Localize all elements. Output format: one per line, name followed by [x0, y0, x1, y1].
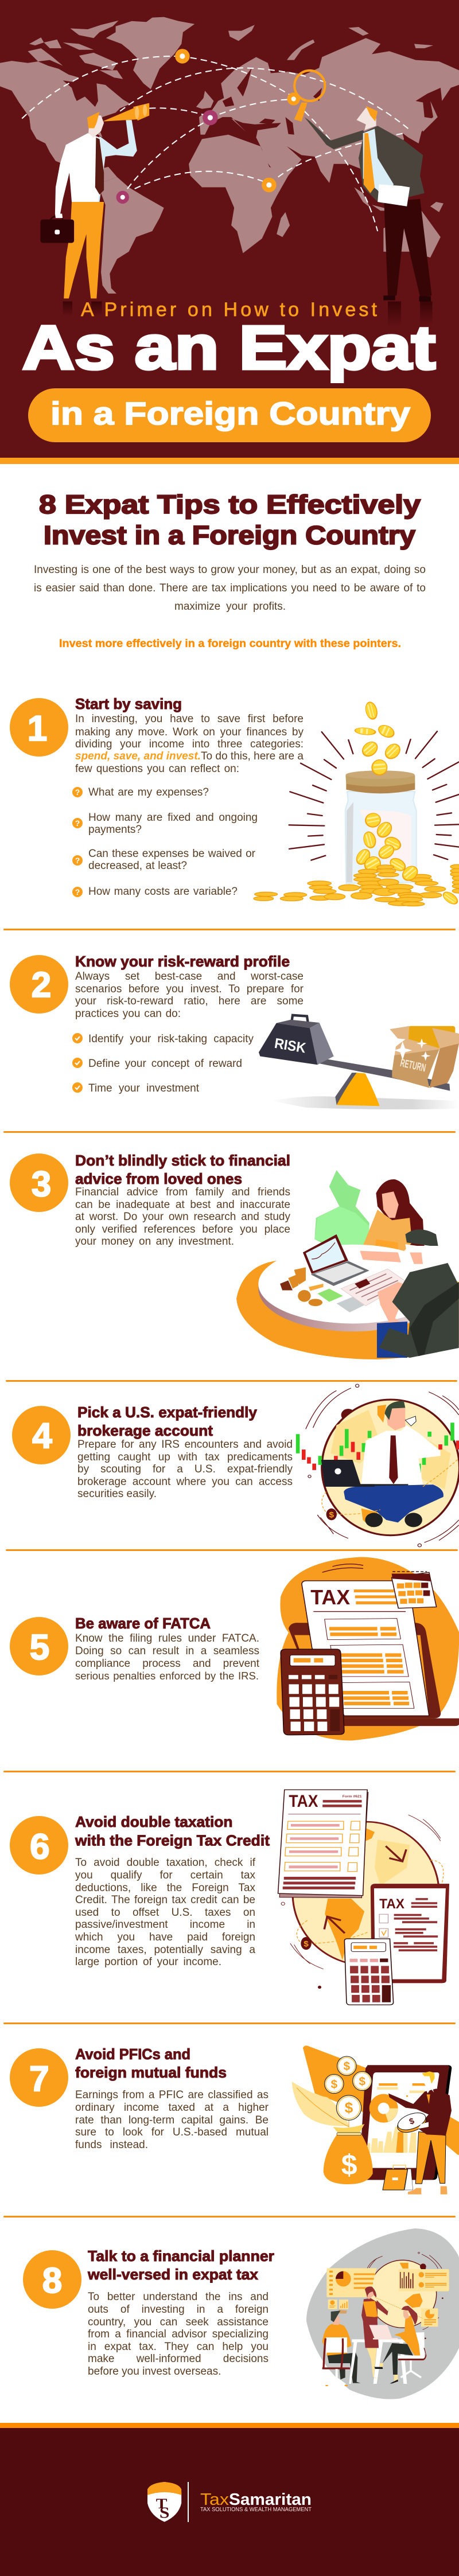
number badge 5 — [10, 1617, 68, 1675]
logo shield: S — [160, 2504, 170, 2522]
body 8: country, you can seek assistance — [88, 2316, 269, 2328]
heading 8 — [88, 2247, 274, 2284]
logo wordmark — [200, 2489, 312, 2513]
intro text: maximize your profits. — [174, 601, 286, 613]
question list: ? — [75, 887, 80, 896]
body 7: funds instead. — [75, 2139, 148, 2151]
heading 6: Avoid double taxation — [75, 1813, 233, 1830]
body 4: by scouting for a U.S. expat-friendly — [77, 1463, 293, 1475]
body 7: rate than long-term capital gains. Be — [75, 2114, 269, 2126]
number badge 1: 1 — [28, 709, 47, 749]
illustration: investor with money bag: $ — [359, 2075, 365, 2088]
body 1 — [75, 713, 304, 775]
number badge 6 — [10, 1816, 68, 1874]
illustration: advisor meeting — [304, 2226, 459, 2403]
number badge 7: 7 — [29, 2059, 49, 2099]
main heading — [39, 490, 422, 551]
heading 8: Talk to a financial planner — [88, 2247, 274, 2265]
orange callout: Invest more effectively in a foreign country with these pointers. — [59, 638, 401, 650]
checklist: Define your concept of reward — [88, 1058, 242, 1070]
heading 4 — [77, 1403, 258, 1439]
panel: tip 8 — [0, 2216, 459, 2423]
number badge 8 — [23, 2250, 81, 2309]
heading 6 — [75, 1813, 270, 1849]
intro text: is easier said than done. There are tax implications you need to be aware of to — [34, 582, 426, 594]
body 8: outs of investing in a foreign — [88, 2304, 269, 2315]
body 6: deductions, like the Foreign Tax — [75, 1881, 255, 1894]
body 1: In investing, you have to save first before — [75, 713, 304, 725]
route lines — [22, 56, 409, 231]
body 3: your money on any investment. — [75, 1236, 234, 1248]
illustration: investor with money bag: $ — [343, 2060, 350, 2073]
heading 4: Pick a U.S. expat-friendly — [77, 1403, 258, 1420]
heading 3: advice from loved ones — [75, 1170, 242, 1187]
body 6 — [75, 1856, 256, 1967]
body 4: getting caught up with tax predicaments — [77, 1451, 293, 1463]
body 4 — [77, 1439, 293, 1500]
body 6: used to offset U.S. taxes on — [75, 1907, 255, 1918]
number badge 2 — [10, 955, 68, 1014]
heading 7 — [75, 2045, 227, 2082]
question list: Can these expenses be waived or — [88, 848, 255, 860]
question list — [72, 786, 258, 898]
body 6: Credit. The foreign tax credit can be — [75, 1894, 255, 1905]
illustration: investor with money bag: $ — [408, 2117, 415, 2127]
number badge 4 — [12, 1406, 71, 1464]
body 5: Doing so can result in a seamless — [75, 1645, 259, 1657]
body 3: only verified references before you place — [75, 1223, 290, 1236]
heading 3 — [75, 1152, 290, 1187]
man with binoculars — [40, 103, 149, 298]
illustration: foreign tax forms and globe: $ — [304, 1940, 309, 1948]
logo wordmark: Tax — [200, 2491, 230, 2509]
body 2 — [75, 971, 304, 1020]
panel: tip 5 — [3, 1557, 459, 1772]
panel: tip 2 — [3, 953, 459, 1133]
number badge 2: 2 — [32, 965, 51, 1005]
man with magnifying glass — [294, 71, 432, 302]
panel: tip 3 — [6, 1152, 459, 1382]
body 5: compliance process and prevent — [75, 1658, 259, 1670]
checklist: Identify your risk-taking capacity — [88, 1033, 254, 1045]
panel: introduction — [34, 490, 426, 650]
body 3: Financial advice from family and friends — [75, 1186, 290, 1198]
body 6: which you have paid foreign — [75, 1931, 255, 1943]
question list: decreased, at least? — [88, 860, 187, 872]
question list: ? — [75, 819, 80, 828]
body 8: before you invest overseas. — [88, 2365, 221, 2377]
body 1: dividing your income into three categories: — [75, 738, 304, 750]
heading 6: with the Foreign Tax Credit — [75, 1831, 270, 1849]
illustration: risk and return seesaw — [258, 1014, 459, 1109]
main heading: Invest in a Foreign Country — [44, 521, 415, 550]
body 5 — [75, 1632, 259, 1682]
illustration: couple reviewing finances — [236, 1170, 459, 1359]
body 4: Prepare for any IRS encounters and avoid — [77, 1439, 293, 1451]
illustration: foreign tax forms and globe: TAX — [289, 1791, 318, 1811]
title pill — [28, 388, 431, 442]
world map — [0, 17, 459, 294]
heading 3: Don’t blindly stick to financial — [75, 1152, 290, 1169]
illustration: investor with laptop and candlesticks: $ — [329, 1511, 334, 1519]
logo shield: T — [156, 2495, 168, 2511]
question list: How many costs are variable? — [88, 886, 238, 898]
main heading: 8 Expat Tips to Effectively — [39, 490, 421, 519]
intro text: Investing is one of the best ways to grow your money, but as an expat, doing so — [34, 564, 426, 576]
illustration: coin jar — [253, 702, 459, 906]
illustration: investor with money bag — [291, 2044, 459, 2197]
illustration: investor with money bag: $ — [341, 2149, 357, 2181]
body 2: practices you can do: — [75, 1007, 181, 1020]
number badge 5: 5 — [30, 1628, 49, 1667]
body 6: passive/investment income in — [75, 1919, 255, 1931]
logo wordmark: Samaritan — [229, 2491, 312, 2509]
checklist — [72, 1033, 254, 1094]
number badge 4: 4 — [32, 1416, 52, 1456]
body 7 — [75, 2089, 269, 2152]
number badge 1 — [10, 698, 68, 757]
body 2: your risk-to-reward ratio, here are some — [75, 995, 304, 1007]
body 3: at worst. Do your own research and study — [75, 1211, 290, 1223]
number badge 3: 3 — [32, 1164, 51, 1205]
illustration: risk and return seesaw: RETURN — [399, 1057, 427, 1074]
heading 5: Be aware of FATCA — [75, 1615, 211, 1632]
body 8: To better understand the ins and — [88, 2291, 269, 2302]
subtitle: A Primer on How to Invest — [81, 299, 378, 321]
body 6: To avoid double taxation, check if — [75, 1856, 255, 1869]
question list: ? — [75, 788, 80, 797]
logo shield — [147, 2482, 181, 2522]
illustration: investor with money bag: $ — [344, 2099, 353, 2117]
body 8: in expat tax. They can help you — [88, 2340, 269, 2353]
body 6: you qualify for certain tax — [75, 1869, 255, 1881]
illustration: tax form and calculator — [277, 1557, 459, 1740]
heading 4: brokerage account — [77, 1422, 213, 1439]
panel: tip 6 — [3, 1790, 456, 2024]
body 1: making any move. Work on your finances by — [75, 726, 304, 738]
header illustration and title — [0, 0, 459, 464]
illustration: tax form and calculator: TAX — [310, 1587, 350, 1609]
body 6: large portion of your income. — [75, 1956, 221, 1967]
heading 7: Avoid PFICs and — [75, 2045, 190, 2063]
body 5: Know the filing rules under FATCA. — [75, 1632, 259, 1644]
panel: header — [0, 0, 459, 464]
heading 1: Start by saving — [75, 695, 182, 712]
body 1: spend, save, and invest.To do this, here are a — [75, 750, 304, 762]
number badge 3 — [10, 1153, 68, 1212]
body 7: ordinary income taxed at a higher — [75, 2102, 269, 2114]
body 1: few questions you can reflect on: — [75, 763, 239, 775]
body 2: scenarios before you invest. To prepare for — [75, 983, 304, 995]
body 7: Earnings from a PFIC are classified as — [75, 2089, 269, 2101]
illustration: foreign tax forms and globe: Form #621 — [343, 1795, 362, 1798]
question list: payments? — [88, 824, 142, 836]
body 5: serious penalties enforced by the IRS. — [75, 1670, 259, 1682]
body 8: from a financial advisor specializing — [88, 2328, 269, 2340]
body 4: securities easily. — [77, 1488, 157, 1500]
logo wordmark: TAX SOLUTIONS & WEALTH MANAGEMENT — [200, 2506, 312, 2513]
intro text — [34, 564, 426, 613]
body 8: make well-informed decisions — [88, 2353, 269, 2364]
title pill: in a Foreign Country — [50, 395, 410, 431]
floor reflections — [63, 302, 433, 326]
panel: footer — [0, 2423, 459, 2576]
body 3: can be inadequate at best and inaccurate — [75, 1199, 290, 1210]
heading 2: Know your risk-reward profile — [75, 953, 290, 970]
question list: What are my expenses? — [88, 786, 209, 798]
body 4: brokerage account where you can access — [77, 1476, 293, 1488]
illustration: investor with money bag: $ — [330, 2078, 337, 2091]
title: As an Expat — [22, 313, 435, 382]
number badge 7 — [10, 2048, 68, 2107]
number badge 8: 8 — [42, 2261, 62, 2301]
panel: tip 4 — [6, 1384, 459, 1551]
body 7: sure to look for U.S.-based mutual — [75, 2126, 269, 2138]
map location markers — [116, 49, 300, 204]
body 3 — [75, 1186, 290, 1248]
number badge 6: 6 — [30, 1827, 50, 1867]
heading 7: foreign mutual funds — [75, 2064, 227, 2081]
body 6: income taxes, potentially saving a — [75, 1943, 255, 1956]
illustration: foreign tax forms and globe: TAX — [379, 1896, 405, 1911]
panel: tip 7 — [3, 2045, 459, 2218]
illustration: risk and return seesaw: RISK — [273, 1035, 307, 1056]
panel: tip 1 — [3, 695, 459, 930]
question list: ? — [75, 856, 80, 865]
question list: How many are fixed and ongoing — [88, 812, 258, 824]
illustration: foreign tax forms and globe — [278, 1790, 450, 2005]
illustration: investor with laptop and candlesticks — [296, 1384, 459, 1548]
body 2: Always set best-case and worst-case — [75, 971, 304, 982]
body 8 — [88, 2291, 269, 2378]
heading 8: well-versed in expat tax — [87, 2266, 259, 2283]
checklist: Time your investment — [88, 1082, 199, 1094]
